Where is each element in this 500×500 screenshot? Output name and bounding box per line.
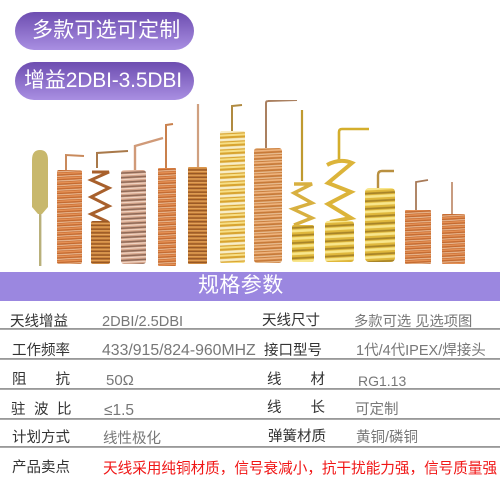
antenna 8: [292, 110, 314, 262]
antenna 2: [91, 151, 128, 264]
value: size: 多款可选 见选项图: [354, 314, 472, 330]
heading band: specifications: [0, 272, 500, 301]
antenna product illustration: [32, 100, 465, 266]
badge: gain: 增益2DBI-3.5DBI: [24, 69, 182, 92]
value: VSWR: ≤1.5: [104, 402, 134, 419]
row: polarization: 计划方式: [12, 430, 70, 446]
heading band: specifications: 规格参数: [198, 274, 284, 297]
row: impedance: 阻 抗: [12, 372, 70, 388]
row: size: 天线尺寸: [262, 313, 320, 329]
antenna 6: [220, 105, 245, 263]
badge: options: 多款可选可定制: [32, 19, 180, 42]
antenna 9: [325, 129, 369, 262]
value: frequency: 433/915/824-960MHZ: [102, 342, 256, 359]
value: cable: RG1.13: [358, 373, 406, 389]
antenna 4: [158, 124, 176, 266]
antenna 1: [57, 155, 84, 264]
row: cable: 线 材: [267, 372, 325, 388]
value: polarization: 线性极化: [103, 431, 161, 447]
antenna 11: [405, 180, 431, 264]
row: connector: 接口型号: [264, 343, 322, 359]
row: length: 线 长: [267, 400, 325, 416]
value: gain: 2DBI/2.5DBI: [102, 314, 183, 330]
value: impedance: 50Ω: [106, 372, 134, 389]
antenna 12: [442, 182, 465, 264]
antenna 5: [188, 104, 207, 264]
specification table: [0, 312, 500, 477]
row: selling points: 产品卖点: [12, 460, 70, 476]
antenna 3: [121, 138, 163, 264]
pin tool: [32, 150, 48, 266]
badge: options: [15, 12, 194, 50]
value: length: 可定制: [355, 402, 398, 418]
value: selling points: 天线采用纯铜材质，信号衰减小，抗干扰能力强，信号质量强: [103, 461, 497, 477]
value: connector: 1代/4代IPEX/焊接头: [356, 343, 486, 359]
badge: gain: [15, 62, 194, 100]
row: VSWR: 驻波比: [11, 402, 80, 418]
value: spring material: 黄铜/磷铜: [356, 430, 418, 446]
antenna 10: [365, 171, 395, 262]
row: gain: 天线增益: [10, 314, 68, 330]
row: frequency: 工作频率: [12, 343, 70, 359]
antenna 7: [254, 100, 297, 263]
row: spring material: 弹簧材质: [268, 429, 326, 445]
